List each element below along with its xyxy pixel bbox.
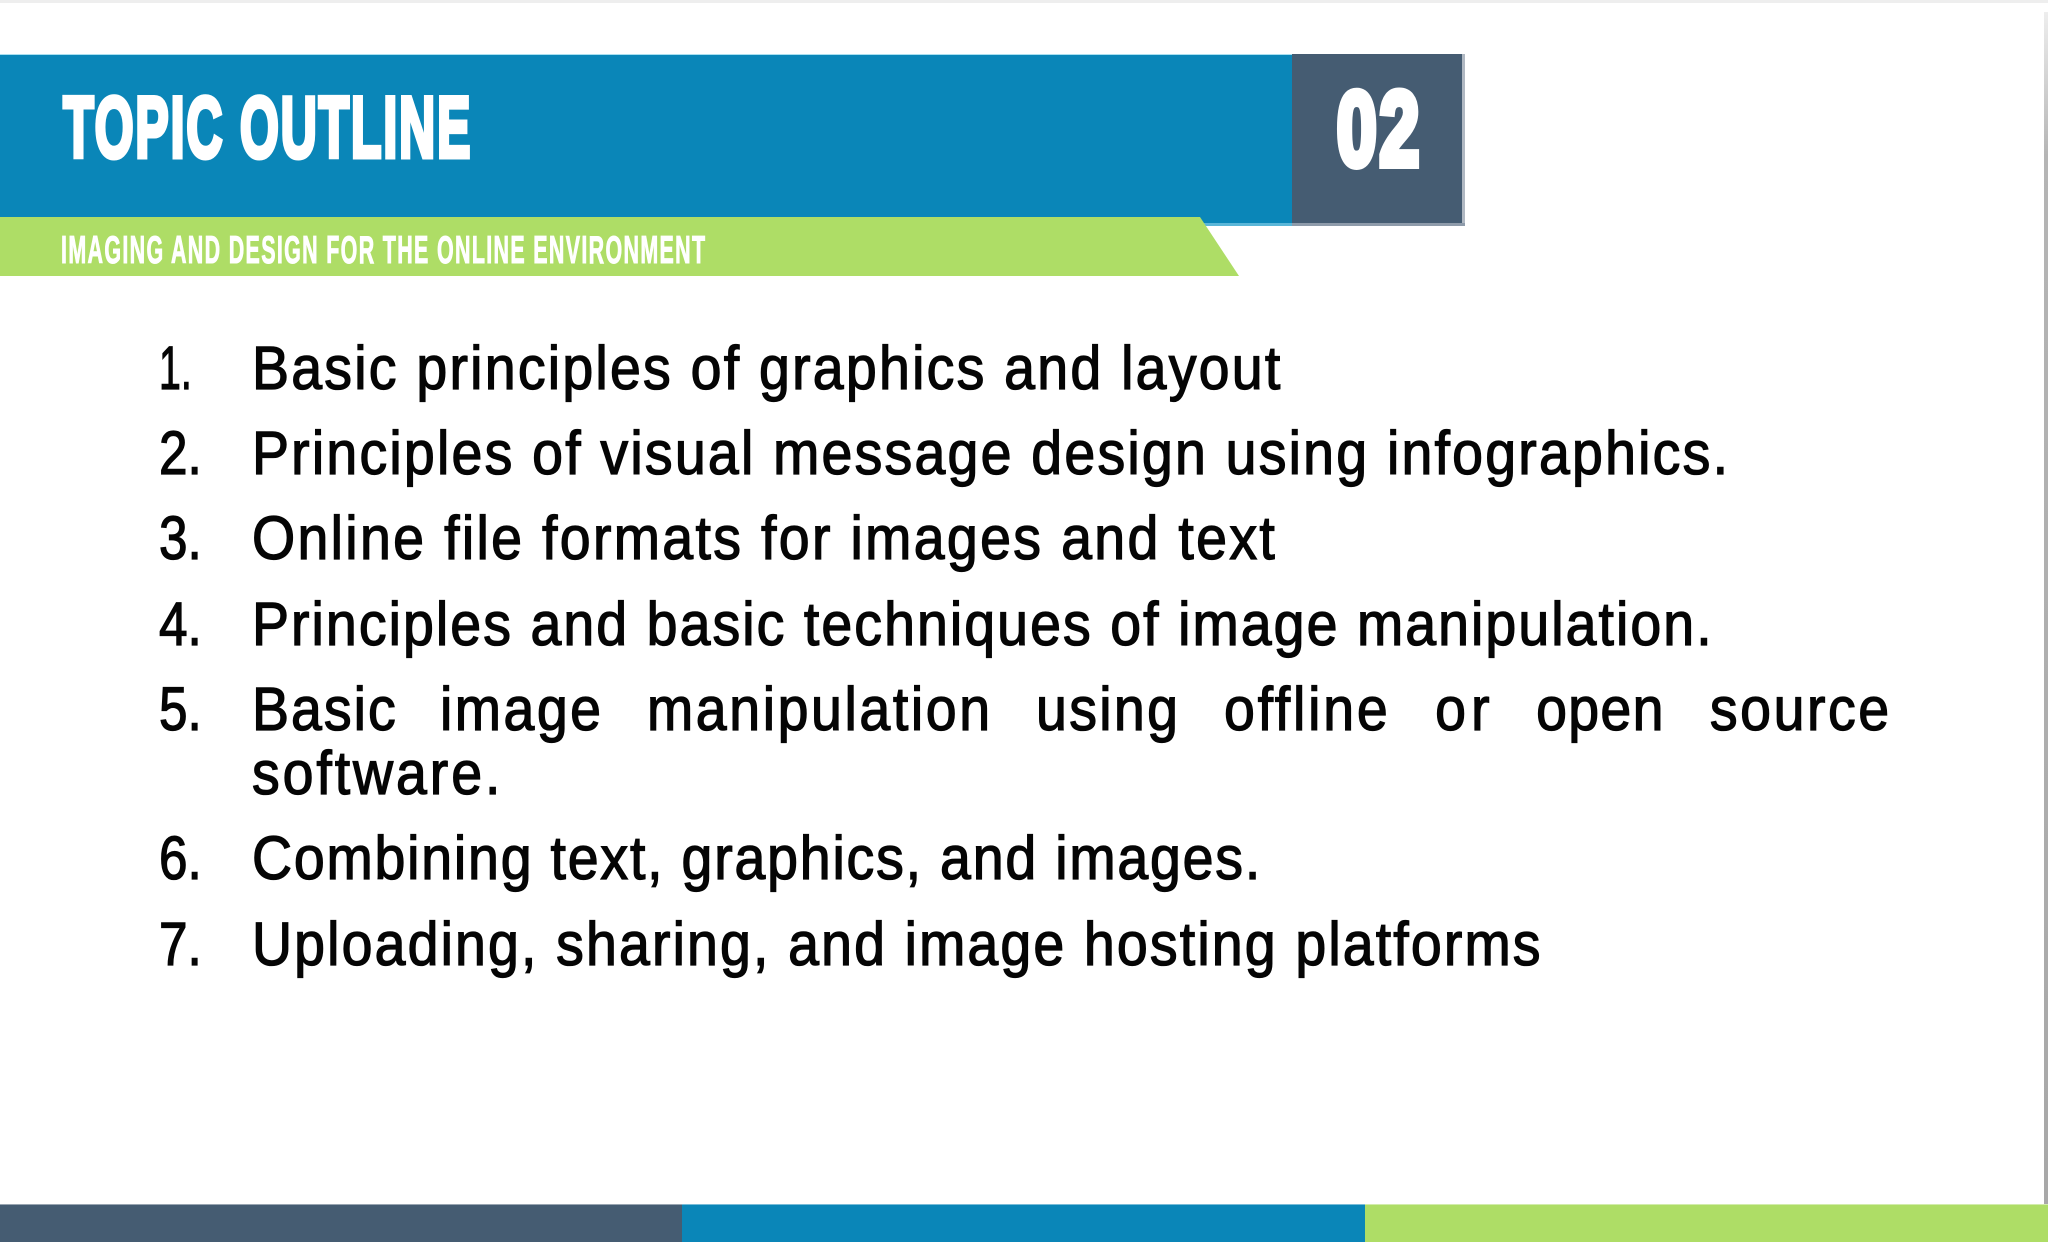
item 5: Basic (252, 676, 396, 744)
panel: green subtitle ribbon (0, 217, 1239, 276)
item 7: 7. (159, 911, 202, 979)
header banner (0, 54, 1465, 276)
item 5: image (440, 676, 601, 744)
item 5: offline (1224, 676, 1388, 744)
title: TOPIC OUTLINE (63, 79, 470, 175)
item 1: Basic principles of graphics and layout (252, 335, 1280, 403)
item 5 (159, 676, 1889, 808)
item 3: 3. (159, 505, 202, 573)
item 2: Principles of visual message design using infographics. (252, 420, 1728, 488)
section number: 02 (1337, 71, 1419, 188)
item 2: 2. (159, 420, 202, 488)
item 6: 6. (159, 825, 202, 893)
item 5: 5. (159, 676, 202, 744)
item 7: Uploading, sharing, and image hosting platforms (252, 911, 1541, 979)
item 1: 1. (159, 335, 192, 403)
panel: blue title bar (0, 54, 1292, 226)
item 5: manipulation (647, 676, 990, 744)
item 5: software. (252, 740, 500, 808)
item 3: Online file formats for images and text (252, 505, 1275, 573)
item 5: or (1435, 676, 1490, 744)
panel: section number box (1292, 54, 1465, 226)
subtitle: IMAGING AND DESIGN FOR THE ONLINE ENVIRONMENT (61, 228, 705, 272)
item 5: open (1536, 676, 1663, 744)
item 5: source (1710, 676, 1889, 744)
item 6: Combining text, graphics, and images. (252, 825, 1260, 893)
item 5: using (1036, 676, 1178, 744)
footer colour bar (0, 1204, 2048, 1242)
item 4: 4. (159, 591, 202, 659)
numbered topic list (159, 335, 1889, 979)
item 4: Principles and basic techniques of image manipulation. (252, 591, 1712, 659)
